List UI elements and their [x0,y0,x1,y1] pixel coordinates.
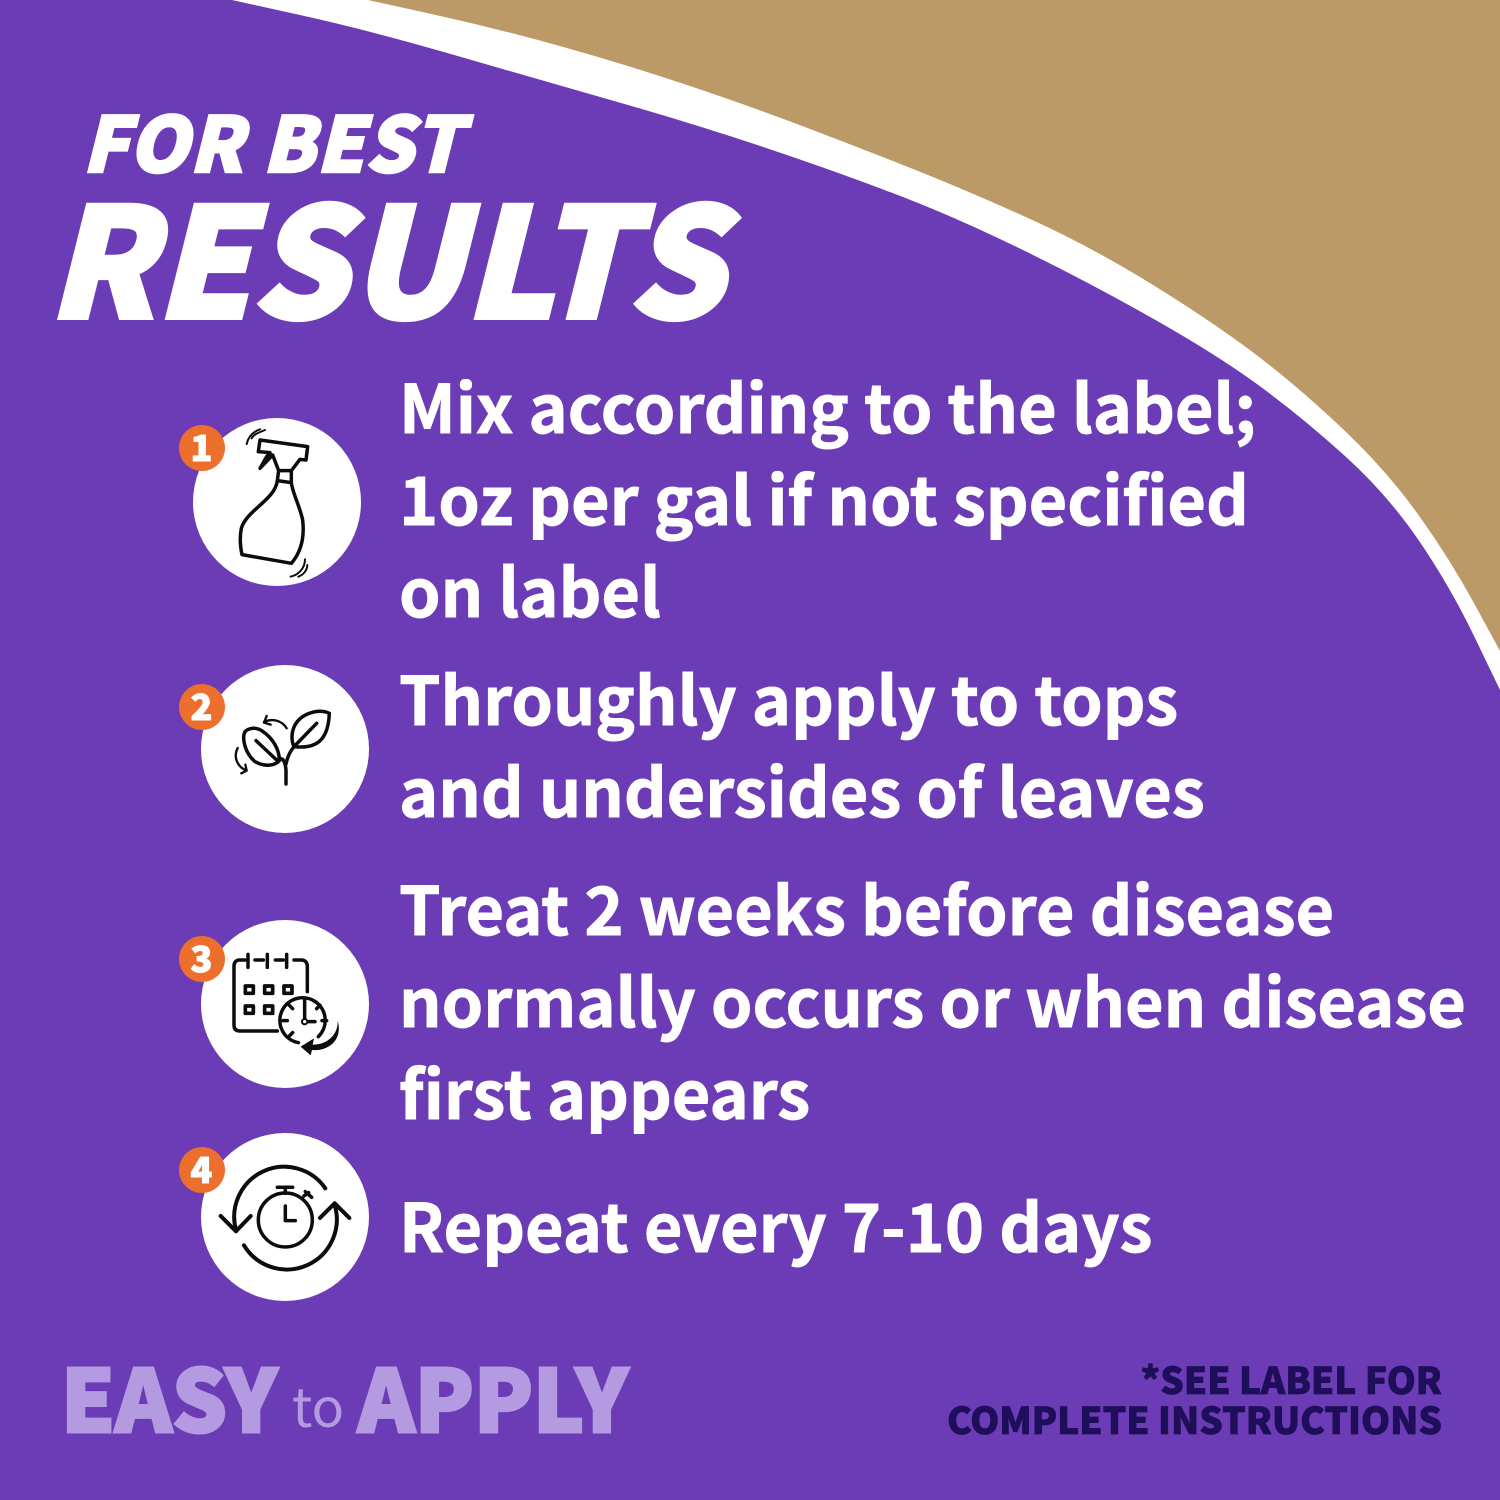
badge 2: 2 [191,679,212,731]
badge 4 [179,1142,225,1194]
title: FOR BEST [82,84,473,194]
step 1 text: 1oz per gal if not specified [399,449,1249,545]
step 2 [179,649,1205,837]
step 4 [179,1133,1152,1301]
badge 2 [179,679,225,731]
icon: spray bottle [193,418,361,586]
badge 1 [179,420,225,472]
badge 3 [179,931,225,983]
badge 4: 4 [191,1142,212,1194]
easy to apply tagline: APPLY [357,1332,630,1457]
icon: leaves [201,665,369,833]
step 1 text: on label [399,541,661,637]
easy to apply tagline: to [292,1364,344,1443]
step 2 text: Throughly apply to tops [399,649,1178,745]
step 3 text: Treat 2 weeks before disease [399,859,1334,955]
step 3 text: normally occurs or when disease [399,951,1466,1047]
label disclaimer: *SEE LABEL FOR [1141,1351,1442,1405]
step 1 text: Mix according to the label; [399,357,1256,453]
title: RESULTS [46,142,740,362]
label disclaimer: COMPLETE INSTRUCTIONS [947,1391,1442,1445]
badge 3: 3 [191,931,212,983]
easy to apply tagline: EASY [61,1332,279,1457]
icon: calendar and clock [201,920,369,1088]
step 3 text: first appears [399,1043,810,1139]
icon: stopwatch cycle [201,1133,369,1301]
badge 1: 1 [191,420,212,472]
step 4 text: Repeat every 7-10 days [399,1176,1152,1272]
step 1 [179,357,1256,637]
step 3 [179,859,1466,1139]
white swoosh band [232,0,1500,690]
tan corner [368,0,1500,651]
step 2 text: and undersides of leaves [399,741,1205,837]
